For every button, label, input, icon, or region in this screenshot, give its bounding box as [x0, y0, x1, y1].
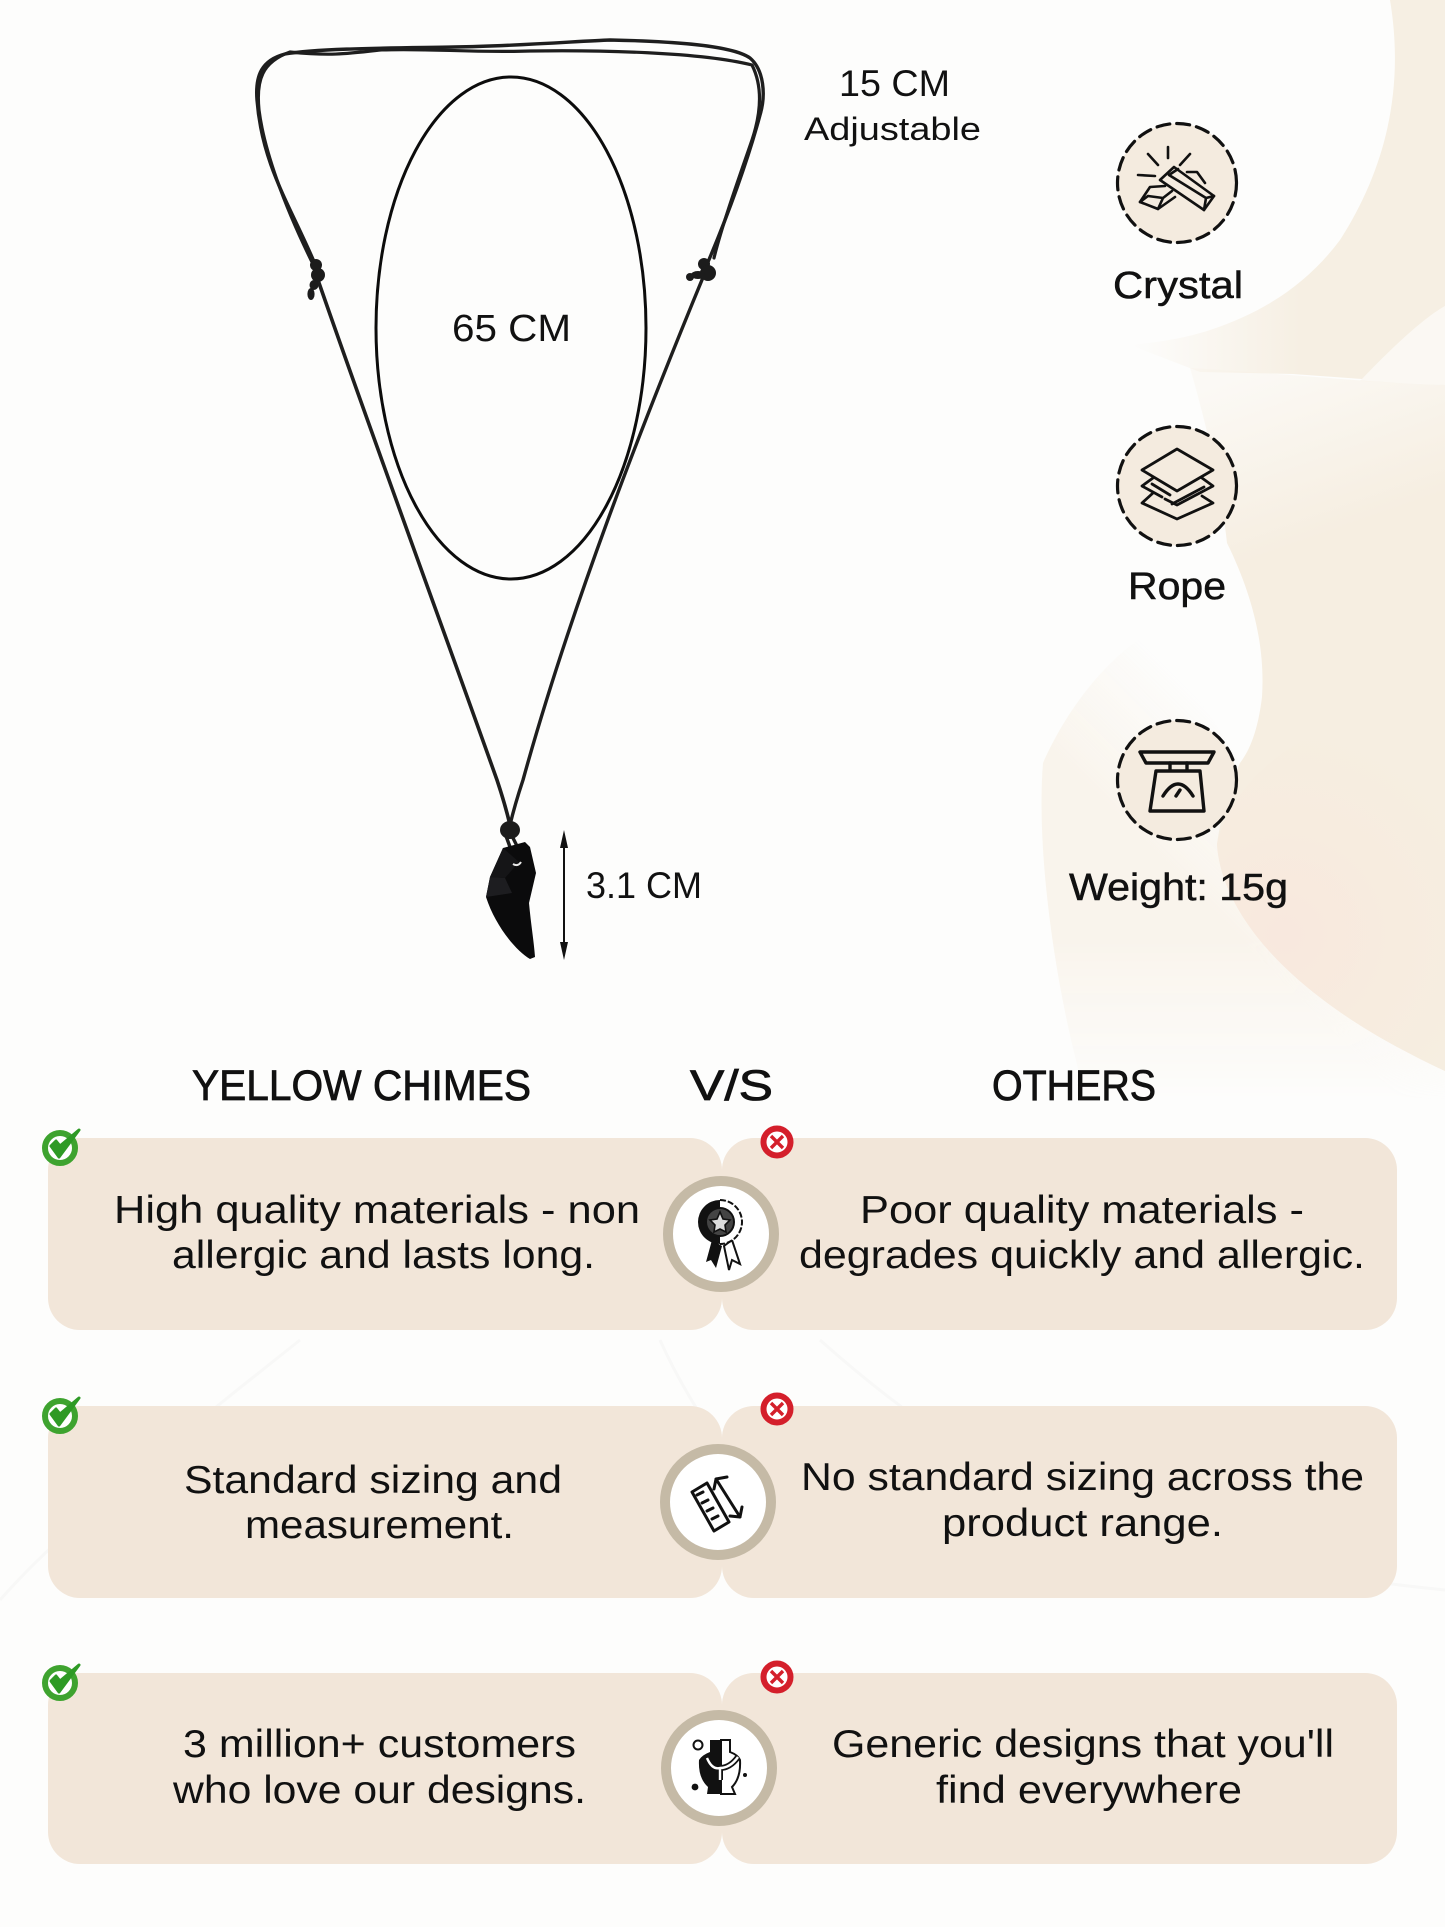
- icon: check: [45, 1665, 79, 1698]
- comparison row: sizing: [45, 1396, 1397, 1598]
- label: 65 CM: 65 CM: [452, 308, 571, 350]
- spec: Weight: [1069, 720, 1288, 909]
- panel: Others sizing: No standard sizing across the: [801, 1456, 1364, 1499]
- icon: layers: [1118, 426, 1236, 546]
- neck ellipse: [376, 77, 646, 579]
- arrow: pendant height: [560, 830, 568, 960]
- panel: Others sizing: product range.: [942, 1502, 1223, 1545]
- panel: Yellow Chimes sizing: Standard sizing and: [184, 1459, 562, 1502]
- panel: Yellow Chimes designs: [48, 1673, 722, 1864]
- icon: cross: [764, 1396, 790, 1422]
- panel: Others designs: find everywhere: [936, 1769, 1242, 1812]
- icon: necklace bust: [666, 1715, 772, 1821]
- icon: check: [45, 1130, 79, 1163]
- label: Weight: Weight: 15g: [1069, 867, 1288, 909]
- icon: cross: [764, 1664, 790, 1690]
- icon: gold bars: [1118, 124, 1236, 242]
- label: Crystal: Crystal: [1113, 265, 1243, 307]
- panel: Yellow Chimes sizing: [48, 1406, 722, 1598]
- icon: ruler and arrow: [665, 1449, 771, 1555]
- panel: Yellow Chimes quality: High quality materials - non: [114, 1189, 640, 1232]
- spec: Crystal: [1113, 124, 1243, 307]
- heading: Others: OTHERS: [992, 1062, 1156, 1110]
- label: 15 CM: 15 CM: [839, 63, 950, 104]
- panel: Others designs: Generic designs that you'll: [832, 1723, 1334, 1766]
- panel: Yellow Chimes quality: [48, 1138, 722, 1330]
- necklace cord: [257, 40, 763, 825]
- heading: Yellow Chimes: YELLOW CHIMES: [192, 1062, 531, 1110]
- panel: Others sizing: [722, 1406, 1397, 1598]
- spec: Rope: [1118, 426, 1236, 608]
- label: Rope: Rope: [1128, 566, 1226, 608]
- panel: Yellow Chimes sizing: measurement.: [245, 1504, 514, 1547]
- icon: cross: [764, 1128, 790, 1156]
- panel: Others quality: [722, 1138, 1397, 1330]
- necklace diagram: [257, 40, 981, 960]
- label: Adjustable: Adjustable: [804, 111, 981, 147]
- icon: badge: [668, 1181, 774, 1287]
- panel: Yellow Chimes designs: who love our designs.: [172, 1769, 586, 1812]
- icon: check: [45, 1398, 79, 1431]
- panel: Yellow Chimes designs: 3 million+ customers: [183, 1723, 576, 1766]
- label: 3.1 CM: 3.1 CM: [586, 865, 702, 906]
- right knot: [686, 258, 716, 281]
- comparison row: quality: [45, 1128, 1397, 1330]
- background: [1042, 0, 1445, 1071]
- pendant: [486, 821, 536, 959]
- comparison row: designs: [45, 1664, 1397, 1864]
- heading: V/S: V/S: [690, 1062, 773, 1110]
- panel: Others quality: Poor quality materials -: [860, 1189, 1304, 1232]
- left knot: [307, 259, 325, 300]
- panel: Others quality: degrades quickly and allergic.: [799, 1234, 1365, 1277]
- panel: Yellow Chimes quality: allergic and lasts long.: [172, 1234, 595, 1277]
- icon: scale: [1118, 720, 1236, 840]
- heading: comparison: [192, 1062, 1156, 1110]
- panel: Others designs: [722, 1673, 1397, 1864]
